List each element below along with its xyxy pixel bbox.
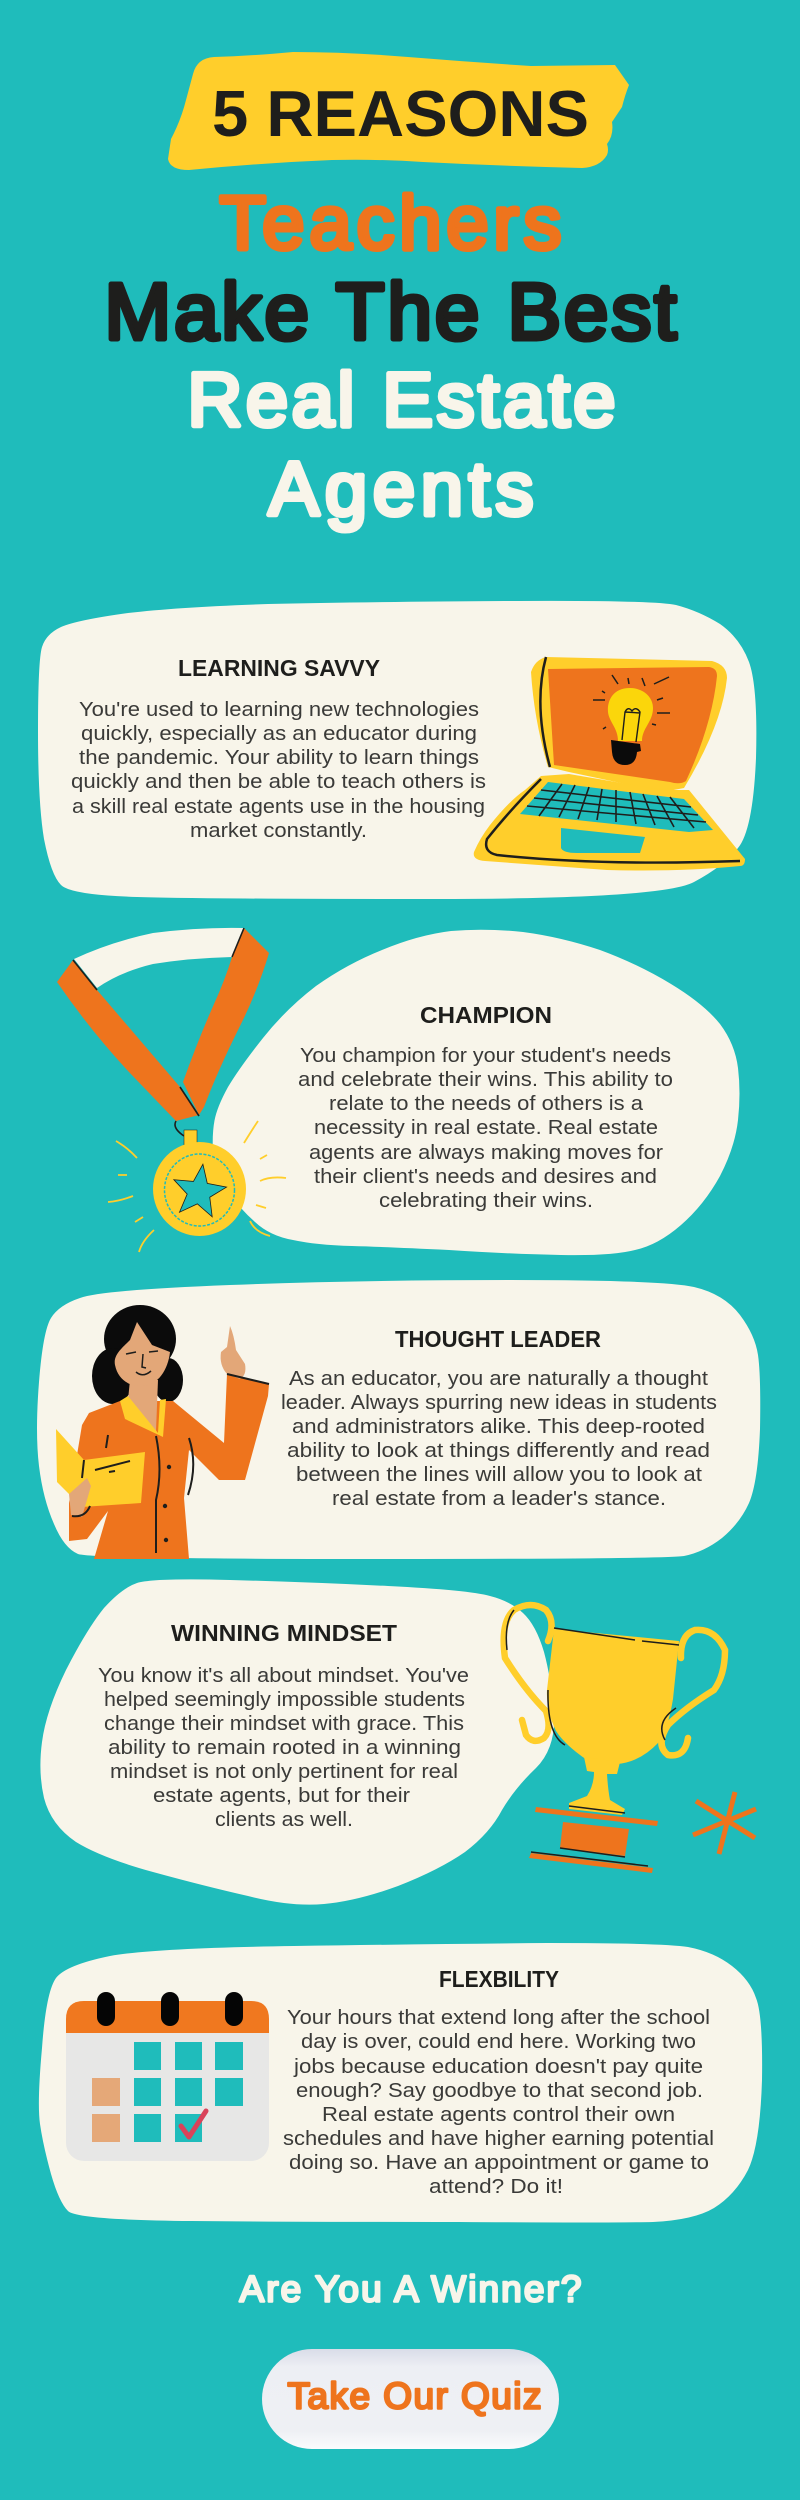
heading: WINNING MINDSET — [171, 1620, 397, 1646]
panel: winning mindset — [40, 1579, 554, 1905]
button label: Take Our Quiz — [288, 2376, 542, 2416]
panel background — [213, 930, 739, 1255]
body text: ability to look at things differently and read — [287, 1440, 710, 1462]
body text — [71, 699, 486, 842]
body text: change their mindset with grace. This — [104, 1713, 464, 1735]
body text: and celebrate their wins. This ability to — [298, 1069, 673, 1091]
panel: champion — [213, 930, 739, 1255]
body text: between the lines will allow you to look at — [296, 1464, 702, 1486]
panel background — [40, 1579, 554, 1905]
panel background — [38, 601, 756, 899]
icon: teacher pointing up with book — [56, 1305, 269, 1559]
title line: make the best: Make The Best — [104, 267, 676, 356]
call to action heading: Are You A Winner? — [240, 2268, 582, 2310]
heading: THOUGHT LEADER — [395, 1326, 601, 1352]
body text: mindset is not only pertinent for real — [110, 1761, 458, 1783]
body text: quickly and then be able to teach others is — [71, 771, 486, 793]
body text: As an educator, you are naturally a thought — [289, 1368, 708, 1390]
body text: doing so. Have an appointment or game to — [289, 2152, 709, 2174]
body text: market constantly. — [190, 820, 367, 842]
body text: quickly, especially as an educator during — [81, 723, 477, 745]
heading: 5 reasons: 5 REASONS — [212, 77, 589, 150]
body text — [283, 2007, 714, 2198]
panel background — [37, 1280, 760, 1559]
body text: schedules and have higher earning potential — [283, 2128, 714, 2150]
heading: FLEXBILITY — [439, 1966, 559, 1992]
body text — [98, 1665, 469, 1831]
body text: clients as well. — [215, 1809, 353, 1831]
body text: helped seemingly impossible students — [104, 1689, 465, 1711]
title line: real estate: Real Estate — [188, 358, 616, 443]
body text: the pandemic. Your ability to learn things — [79, 747, 479, 769]
body text: Your hours that extend long after the school — [287, 2007, 710, 2029]
yellow brush banner — [168, 52, 629, 170]
icon: calendar — [66, 1992, 269, 2161]
body text: real estate from a leader's stance. — [332, 1488, 666, 1510]
title line: teachers: Teachers — [220, 181, 562, 266]
icon: gold medal on ribbon — [57, 928, 286, 1252]
body text: You're used to learning new technologies — [79, 699, 479, 721]
panel: thought leader — [37, 1280, 760, 1559]
body text: You champion for your student's needs — [300, 1045, 671, 1067]
body text: necessity in real estate. Real estate — [314, 1117, 658, 1139]
body text: You know it's all about mindset. You've — [98, 1665, 469, 1687]
panel: learning savvy — [38, 601, 756, 899]
quiz button — [262, 2349, 559, 2449]
icon: laptop with light bulb — [474, 657, 745, 870]
body text: attend? Do it! — [429, 2176, 563, 2198]
panel: flexibility — [39, 1943, 762, 2222]
body text: leader. Always spurring new ideas in students — [281, 1392, 717, 1414]
body text: day is over, could end here. Working two — [301, 2031, 696, 2053]
body text: their client's needs and desires and — [314, 1166, 657, 1188]
body text: Real estate agents control their own — [322, 2104, 675, 2126]
heading: LEARNING SAVVY — [178, 655, 380, 681]
body text: relate to the needs of others is a — [329, 1093, 644, 1115]
panel background — [39, 1943, 762, 2222]
body text: and administrators alike. This deep-rooted — [292, 1416, 705, 1438]
heading: CHAMPION — [420, 1002, 552, 1028]
title line: agents: Agents — [268, 447, 534, 532]
title block — [104, 52, 676, 532]
body text: celebrating their wins. — [379, 1190, 593, 1212]
body text: estate agents, but for their — [153, 1785, 410, 1807]
body text: enough? Say goodbye to that second job. — [296, 2080, 703, 2102]
body text: ability to remain rooted in a winning — [108, 1737, 461, 1759]
icon: orange asterisk — [693, 1792, 756, 1854]
body text — [281, 1368, 717, 1510]
body text: jobs because education doesn't pay quite — [293, 2056, 703, 2078]
icon: gold trophy — [504, 1605, 756, 1873]
body text — [298, 1045, 673, 1212]
body text: a skill real estate agents use in the housing — [72, 796, 485, 818]
body text: agents are always making moves for — [309, 1142, 663, 1164]
